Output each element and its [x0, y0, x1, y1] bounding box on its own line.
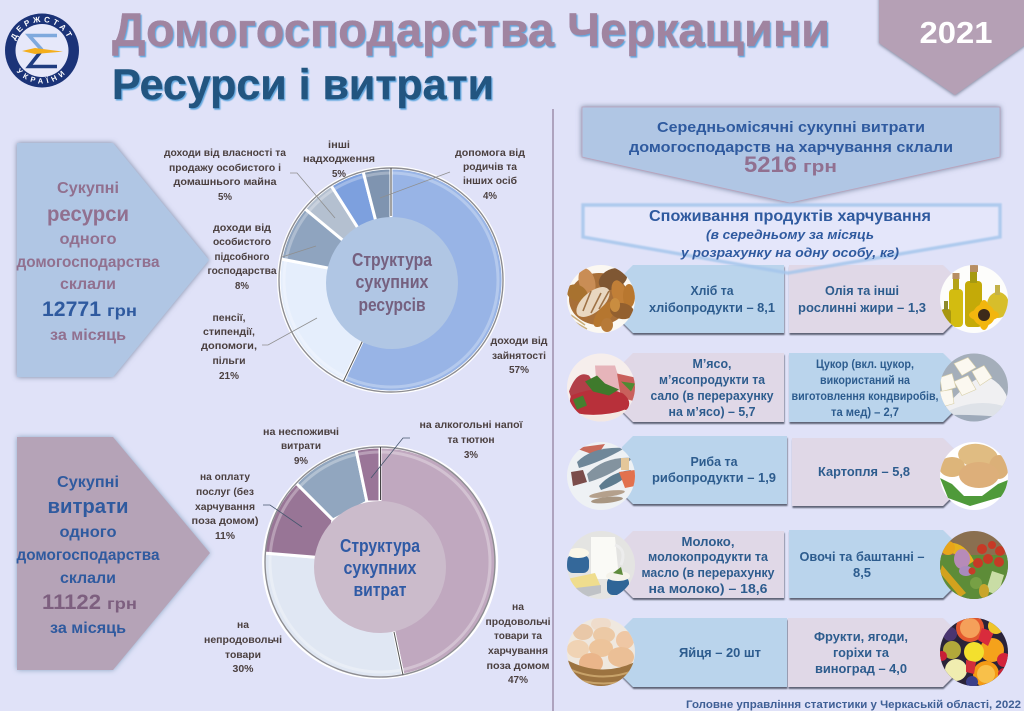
row 4 left box: milk: масло (в перерахунку: [642, 565, 775, 580]
banner: monthly food spending: [582, 107, 1000, 203]
label: other income: надходження: [303, 154, 375, 165]
row 5 right box: fruit: [788, 618, 954, 687]
panel: total resources arrow: [16, 143, 209, 377]
row 2 right box: sugar: Цукор (вкл. цукор,: [816, 357, 914, 371]
label: employment income: [490, 336, 548, 376]
label: non-consumer expenditure: 9%: [294, 456, 308, 467]
chart centre: title: Структура: [340, 536, 421, 556]
label: non-food goods: на: [237, 620, 249, 631]
row 2 left box: meat: сало (в перерахунку: [650, 388, 774, 403]
chart centre: title: ресурсів: [358, 295, 426, 315]
icon: eggs: [567, 617, 635, 686]
row 1 left box: bread: [622, 265, 784, 333]
title: [112, 3, 830, 109]
year badge: 2021: [920, 15, 992, 50]
label: food: товари та: [494, 631, 542, 642]
chart centre: title: сукупних: [344, 558, 416, 578]
row 3 left box: fish: рибопродукти – 1,9: [652, 470, 776, 485]
slice: subsidiary farm 8%: [281, 209, 349, 270]
row 1 left box: bread: Хліб та: [690, 283, 734, 298]
panel: total resources arrow: Сукупні: [57, 180, 119, 197]
label: employment income: доходи від: [490, 336, 548, 347]
panel: total resources arrow: грн: [107, 303, 137, 320]
row 4 right box: vegetables: Овочі та баштанні –: [800, 549, 924, 564]
row 2 right box: sugar: [789, 353, 954, 422]
label: help from relatives: інших осіб: [463, 175, 517, 187]
label: food: продовольчі: [486, 617, 551, 628]
label: property income: [164, 148, 286, 203]
logo: Derzhstat: ДЕРЖСТАТ: [11, 16, 72, 42]
label: food: на: [512, 602, 524, 613]
label: pensions: [201, 313, 257, 382]
panel: total expenditure arrow: Сукупні: [57, 474, 119, 491]
chart labels: resources: [164, 140, 548, 382]
label: services: послуг (без: [196, 486, 254, 498]
label: services: [192, 472, 258, 542]
label: food: поза домом: [486, 661, 550, 672]
icon: fish: [567, 442, 635, 510]
banner: monthly food spending: Середньомісячні сукупні витрати: [657, 119, 925, 136]
banner: food consumption heading: Споживання продуктів харчування: [649, 208, 931, 225]
row 5 left box: eggs: [622, 618, 787, 687]
row 4 left box: milk: Молоко,: [682, 534, 734, 549]
label: pensions: стипендії,: [203, 327, 255, 338]
leader lines: expenditure chart: [263, 438, 410, 527]
slice: other income 5%: [331, 172, 377, 234]
row 2 right box: sugar: виготовлення кондвиробів,: [792, 389, 938, 403]
label: property income: доходи від власності та: [164, 148, 286, 159]
row 3 right box: potatoes: Картопля – 5,8: [818, 464, 910, 479]
slice: services 11%: [264, 483, 333, 558]
icon: bread: [564, 264, 635, 333]
label: food: харчування: [488, 646, 548, 657]
label: subsidiary farm: 8%: [235, 281, 249, 292]
row 1 left box: bread: хлібопродукти – 8,1: [649, 300, 775, 315]
slice: property income 5%: [305, 185, 362, 245]
panel: total expenditure arrow: склали: [60, 570, 116, 587]
panel: total expenditure arrow: [16, 437, 210, 670]
label: employment income: 57%: [509, 365, 529, 376]
panel: total expenditure arrow: витрати: [48, 496, 128, 518]
label: subsidiary farm: доходи від: [213, 223, 272, 234]
label: pensions: допомоги,: [201, 341, 257, 352]
panel: total resources arrow: ресурси: [47, 203, 129, 226]
logo: Derzhstat: УКРАЇНИ: [16, 68, 65, 84]
chart centre: title: Структура: [352, 250, 433, 270]
label: alcohol and tobacco: на алкогольні напої: [420, 420, 523, 431]
row 3 right box: potatoes: [792, 438, 954, 506]
label: non-food goods: товари: [225, 650, 261, 661]
title: Ресурси і витрати: [112, 61, 494, 109]
row 2 right box: sugar: та мед) – 2,7: [831, 405, 899, 419]
label: food: [486, 602, 551, 686]
label: help from relatives: [455, 148, 526, 202]
vertical divider: [552, 109, 554, 711]
row 4 left box: milk: на молоко) – 18,6: [648, 581, 768, 596]
row 4 right box: vegetables: 8,5: [853, 565, 871, 580]
panel: total resources arrow: одного: [60, 231, 116, 248]
label: subsidiary farm: господарства: [208, 266, 277, 277]
label: alcohol and tobacco: 3%: [464, 450, 478, 461]
row 4 left box: milk: молокопродукти та: [648, 549, 769, 564]
label: subsidiary farm: підсобного: [214, 251, 270, 263]
donut chart: resources structure: [277, 166, 505, 394]
logo: Derzhstat: [5, 14, 79, 88]
title: Домогосподарства Черкащини: [112, 3, 830, 56]
label: pensions: пільги: [212, 356, 246, 367]
icon: sugar: [940, 354, 1008, 422]
row 5 right box: fruit: Фрукти, ягоди,: [814, 629, 908, 644]
chart centre: title: [314, 501, 446, 633]
row 2 left box: meat: [622, 353, 784, 422]
row 4 right box: vegetables: [789, 530, 954, 598]
icon: fruit: [940, 618, 1008, 686]
label: subsidiary farm: особистого: [213, 236, 271, 248]
banner: food consumption heading: у розрахунку на одну особу, кг): [680, 245, 899, 260]
label: subsidiary farm: [208, 223, 277, 292]
row 4 left box: milk: [622, 531, 784, 598]
label: services: поза домом): [192, 516, 258, 527]
label: services: 11%: [215, 531, 235, 542]
slice: food 47%: [380, 447, 497, 675]
panel: total expenditure arrow: домогосподарства: [16, 547, 160, 564]
banner: food consumption heading: (в середньому за місяць: [706, 227, 874, 242]
row 5 left box: eggs: Яйця – 20 шт: [679, 645, 761, 660]
slice: alcohol and tobacco 3%: [356, 447, 380, 502]
label: other income: інші: [328, 140, 350, 151]
label: food: 47%: [508, 675, 528, 686]
label: non-consumer expenditure: [263, 427, 339, 467]
source footer: Головне управління статистики у Черкаській області, 2022: [686, 699, 1021, 711]
banner: monthly food spending: грн: [803, 157, 837, 176]
banner fill: food consumption: [583, 205, 1000, 273]
leader lines: resources chart: [262, 172, 450, 345]
label: non-food goods: [204, 620, 282, 675]
panel: total expenditure arrow: 11122: [42, 591, 101, 614]
slice: employment income 57%: [343, 168, 503, 392]
label: alcohol and tobacco: [420, 420, 523, 461]
label: property income: домашнього майна: [174, 177, 277, 188]
panel: total resources arrow: склали: [60, 276, 116, 293]
year badge: [879, 0, 1024, 95]
label: help from relatives: допомога від: [455, 148, 526, 159]
panel: total resources arrow: 12771: [42, 298, 101, 321]
row 5 right box: fruit: горіхи та: [833, 645, 890, 660]
label: non-consumer expenditure: витрати: [281, 441, 321, 452]
label: services: харчування: [195, 502, 255, 513]
chart labels: expenditure: [192, 420, 551, 686]
panel: total expenditure arrow: грн: [107, 596, 137, 613]
icon: potatoes: [939, 441, 1009, 510]
row 3 left box: fish: Риба та: [690, 454, 738, 469]
row 1 right box: oil: [789, 265, 954, 333]
icon: meat: [567, 354, 635, 422]
banner: monthly food spending: 5216: [744, 152, 797, 177]
label: employment income: зайнятості: [492, 351, 546, 362]
row 2 right box: sugar: використаний на: [820, 373, 910, 387]
panel: total expenditure arrow: за місяць: [50, 620, 126, 637]
chart centre: title: [326, 217, 458, 349]
donut chart: expenditure structure: [263, 445, 497, 679]
row 1 right box: oil: рослинні жири – 1,3: [798, 300, 926, 315]
row 1 right box: oil: Олія та інші: [825, 283, 899, 298]
panel: total resources arrow: за місяць: [50, 327, 126, 344]
chart centre: title: витрат: [354, 580, 407, 600]
label: pensions: 21%: [219, 371, 239, 382]
label: non-food goods: непродовольчі: [204, 635, 282, 646]
label: other income: [303, 140, 375, 180]
row 3 left box: fish: [622, 436, 787, 504]
label: help from relatives: 4%: [483, 191, 497, 202]
chart centre: title: сукупних: [356, 272, 428, 292]
icon: oil bottles: [940, 265, 1009, 333]
panel: total expenditure arrow: одного: [60, 524, 116, 541]
icon: milk: [567, 531, 635, 599]
row 5 right box: fruit: виноград – 4,0: [815, 661, 907, 676]
banner: monthly food spending: домогосподарств на харчування склали: [629, 139, 953, 156]
label: property income: продажу особистого і: [169, 162, 281, 174]
slice: pensions 21%: [279, 259, 368, 381]
label: non-food goods: 30%: [232, 664, 254, 675]
banner: food consumption heading: [583, 205, 1000, 273]
row 2 left box: meat: м’ясопродукти та: [659, 372, 766, 387]
icon: vegetables: [940, 531, 1008, 599]
panel: total resources arrow: домогосподарства: [16, 254, 160, 271]
row 2 left box: meat: М’ясо,: [692, 356, 732, 371]
row 2 left box: meat: на м’ясо) – 5,7: [668, 404, 756, 419]
slice: non-food goods 30%: [264, 553, 403, 678]
label: property income: 5%: [218, 192, 232, 203]
label: non-consumer expenditure: на неспоживчі: [263, 427, 339, 438]
label: other income: 5%: [332, 169, 346, 180]
slice: help from relatives 4%: [363, 168, 391, 227]
slice: non-consumer expenditure 9%: [296, 450, 367, 520]
label: alcohol and tobacco: та тютюн: [448, 435, 494, 446]
label: services: на оплату: [200, 472, 250, 483]
label: help from relatives: родичів та: [463, 162, 517, 173]
label: pensions: пенсії,: [212, 313, 246, 324]
